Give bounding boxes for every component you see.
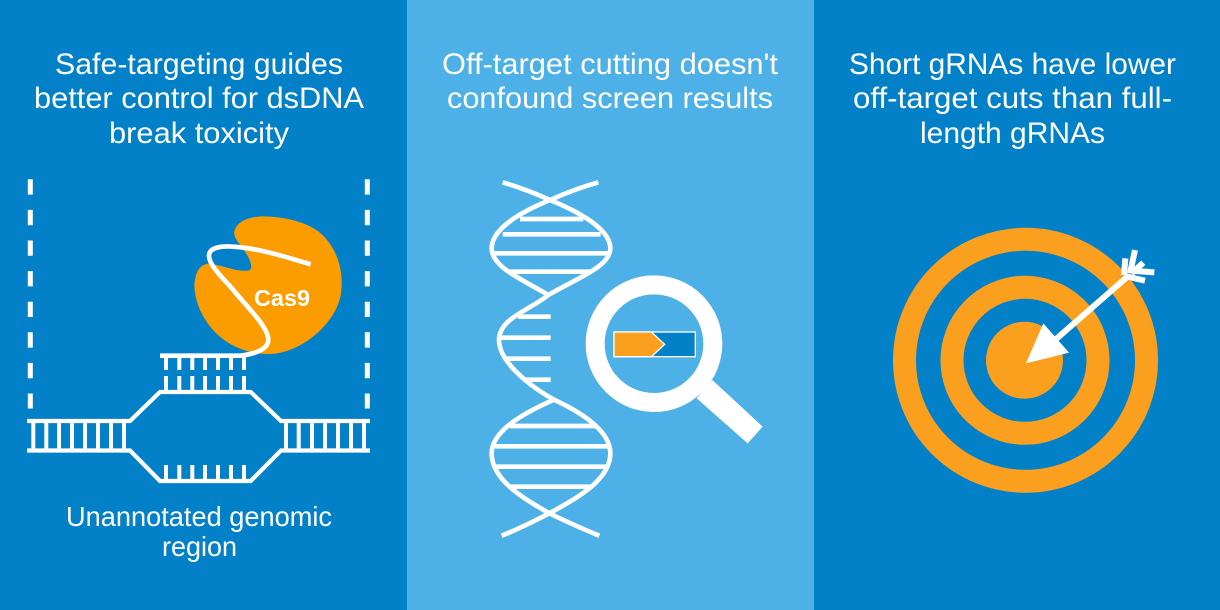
heading: short gRNAs: off-target cuts than full-: [853, 82, 1172, 115]
heading: off-target cutting: [442, 48, 778, 115]
icon: DNA double helix: [492, 182, 610, 536]
heading: short gRNAs: [849, 48, 1176, 150]
dashed region boundaries: [30, 179, 367, 408]
guide RNA strand: [160, 246, 311, 356]
icon: Cas9 protein: [194, 216, 342, 354]
heading: safe-targeting guides: [34, 48, 364, 150]
icon: DNA with open bubble: [27, 357, 370, 481]
caption: unannotated genomic region: Unannotated genomic: [66, 501, 332, 532]
heading: off-target cutting: Off-target cutting doesn't: [442, 48, 778, 81]
icon: arrow: [1026, 250, 1154, 363]
heading: safe-targeting guides: Safe-targeting guides: [55, 48, 343, 81]
panel: off-target cutting: [407, 0, 814, 610]
icon: target: [904, 239, 1146, 481]
caption: unannotated genomic region: region: [162, 531, 237, 562]
icon: magnifying glass: [595, 285, 763, 443]
heading: safe-targeting guides: break toxicity: [109, 117, 289, 150]
heading: short gRNAs: length gRNAs: [920, 117, 1105, 150]
caption: unannotated genomic region: [66, 501, 332, 562]
heading: off-target cutting: confound screen results: [447, 82, 773, 115]
label: Cas9: Cas9: [254, 285, 310, 311]
panel: safe-targeting guides: [0, 0, 407, 610]
heading: safe-targeting guides: better control for dsDNA: [34, 82, 364, 115]
heading: short gRNAs: Short gRNAs have lower: [849, 48, 1176, 81]
sequence bar: [614, 332, 695, 357]
panel: short gRNAs: [814, 0, 1220, 610]
